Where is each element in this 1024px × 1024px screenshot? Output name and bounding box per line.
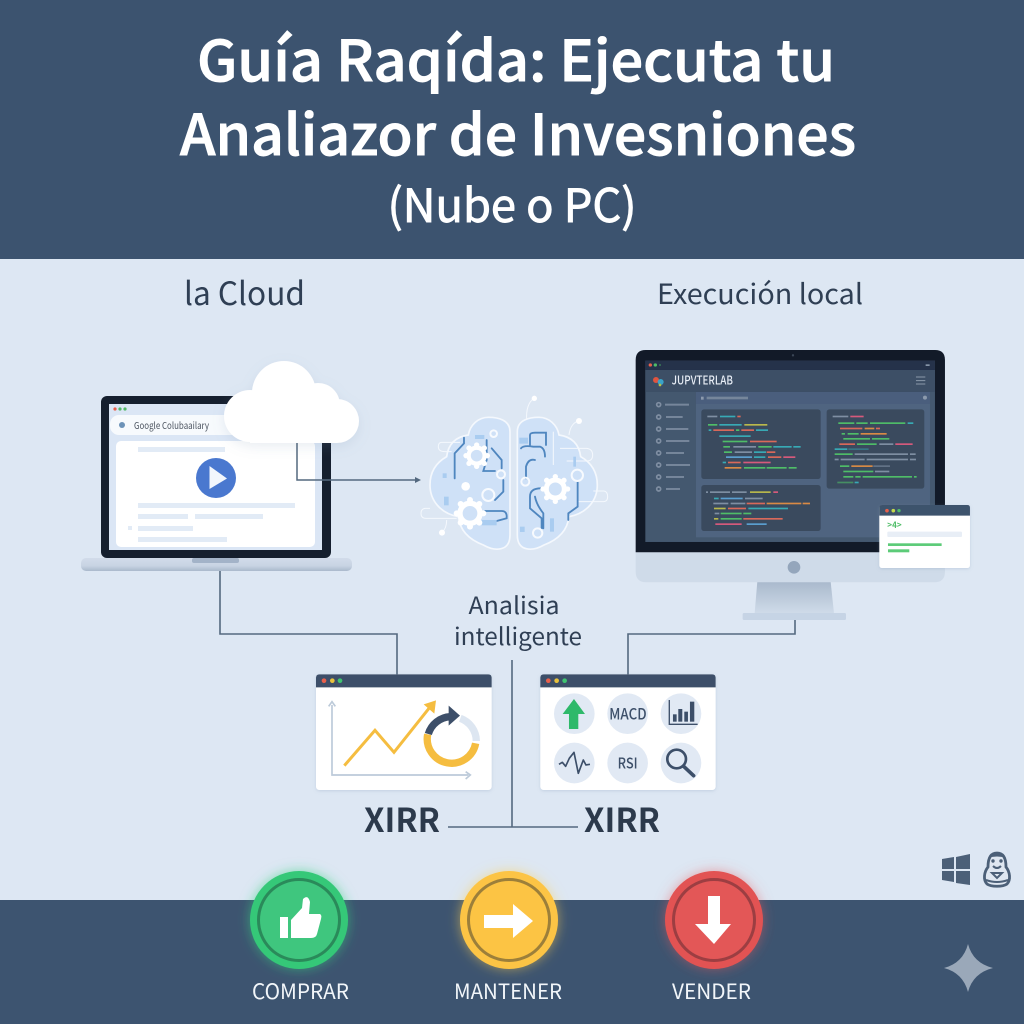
code panel 3 [701,485,821,531]
icon: cloud [224,361,359,443]
icon: play button [196,458,236,498]
MACD: MACD [609,703,647,725]
notebook card [116,441,315,547]
JupyterLab screen [645,361,935,542]
heading: la Cloud: la Cloud [184,269,305,315]
icon: circuit brain [421,396,608,549]
window: indicators [540,674,716,790]
icon: up arrow [563,699,585,729]
desktop monitor: local [636,350,970,620]
icon: wave [559,752,590,773]
browser address bar: Google Colubaailary [134,418,209,432]
icon: sparkle [944,944,993,992]
title: Guía Raqída: Ejecuta tu [197,17,835,98]
sidebar [657,403,690,491]
terminal popup [879,505,970,568]
label: VENDER: VENDER [672,976,751,1006]
JupyterLab label: JUPVTERLAB [672,371,733,388]
code panel 1 [701,409,821,479]
rising line [344,700,436,766]
JupyterLab logo [653,377,664,386]
header banner [0,0,1024,259]
button: vender [665,871,763,969]
icon: linux penguin [984,853,1010,886]
gear left bottom [454,497,486,530]
label: Analisia intelligente [454,586,582,652]
button: comprar [250,871,348,969]
RSI: RSI [618,753,638,774]
code panel 2 [827,409,924,489]
footer bar [0,900,1024,1024]
arrow: cloud to brain [297,443,421,483]
icon: windows [942,854,970,885]
label: XIRR right: XIRR [584,794,660,842]
button: mantener [460,871,558,969]
title: Analiazor de Invesniones [180,91,856,172]
connector lines [220,571,795,827]
browser address bar [110,415,310,435]
label: Analisia intelligente: Analisia [468,586,560,621]
icon: magnifier [667,750,694,776]
icon: thumbs up [280,897,321,938]
gear left top [463,442,490,469]
label: MANTENER: MANTENER [454,976,562,1006]
terminal popup: >4> [887,519,902,531]
title [180,17,856,236]
window: XIRR chart [316,674,492,790]
icon: right arrow [484,904,533,938]
label: XIRR left: XIRR [364,794,440,842]
label: COMPRAR: COMPRAR [252,976,349,1006]
icon: down arrow [695,896,731,944]
heading: Execución local: Execución local [657,273,863,313]
gear right [540,474,570,504]
title: (Nube o PC) [388,170,636,236]
ring gauge [427,706,476,763]
icon: bar chart [669,700,698,724]
laptop: cloud [81,396,352,571]
label: Analisia intelligente: intelligente [454,617,582,652]
chart axes [329,702,470,779]
